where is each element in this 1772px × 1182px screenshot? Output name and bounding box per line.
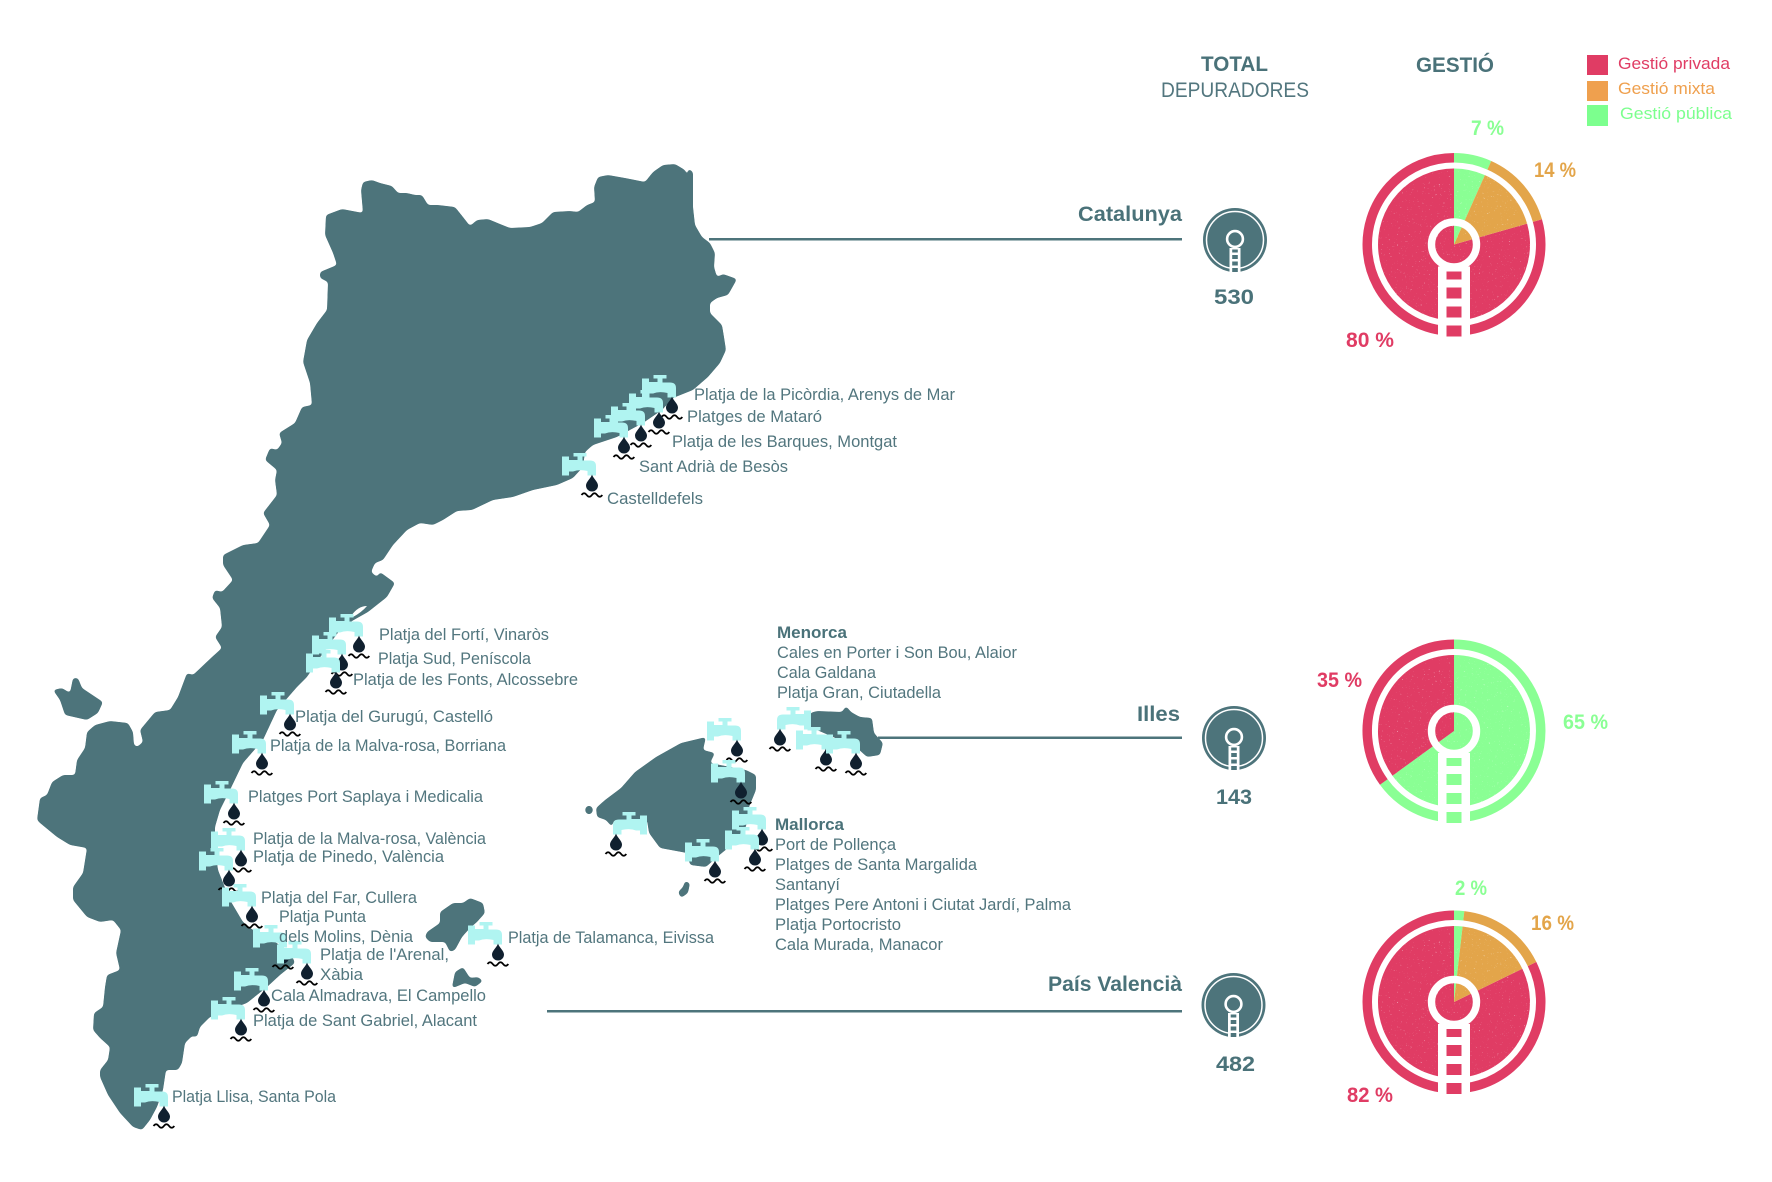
beach labels: País Valencià: Platja del Gurugú, Castelló (295, 707, 493, 726)
beach labels: País Valencià: Platja de Pinedo, València (253, 847, 445, 866)
map: Eivissa (425, 898, 485, 952)
beach list: Mallorca: Platges Pere Antoni i Ciutat Jardí, Palma (775, 895, 1072, 914)
beach labels: País Valencià: Platja Llisa, Santa Pola (172, 1087, 336, 1106)
beach labels: País Valencià: Platges Port Saplaya i Medicalia (248, 787, 484, 806)
beach list: Menorca: Cales en Porter i Son Bou, Alaior (777, 643, 1017, 662)
beach list: Mallorca: Platges de Santa Margalida (775, 855, 978, 874)
pie chart: Catalunya (1367, 158, 1541, 338)
number: Illes total: 143 (1216, 786, 1252, 809)
beach labels: País Valencià: Platja del Far, Cullera (261, 888, 418, 907)
beach list: Mallorca: Port de Pollença (775, 835, 897, 854)
beach labels: País Valencià: Platja de les Fonts, Alcossebre (353, 670, 578, 689)
beach labels: País Valencià (172, 625, 578, 1106)
beach list: Menorca (777, 623, 1017, 702)
beach labels: País Valencià: Cala Almadrava, El Campello (271, 986, 486, 1005)
beach labels: Catalunya: Castelldefels (607, 489, 703, 508)
beach labels: Catalunya: Sant Adrià de Besòs (639, 457, 788, 476)
beach labels: País Valencià: Xàbia (320, 965, 364, 984)
number: Catalunya total: 530 (1214, 286, 1254, 309)
percentage: Catalunya mixta: 14 % (1534, 159, 1576, 182)
beach list: Menorca: Cala Galdana (777, 663, 877, 682)
percentage: Illes pública: 65 % (1563, 711, 1608, 734)
icon: País Valencià total (1202, 973, 1266, 1038)
beach list: Mallorca: Platja Portocristo (775, 915, 901, 934)
beach labels: Catalunya: Platges de Mataró (687, 407, 822, 426)
map: Cabrera (678, 881, 690, 898)
legend: Gestió privada (1618, 54, 1731, 73)
pie chart: País Valencià (1367, 915, 1541, 1096)
pie chart: Illes (1367, 644, 1541, 825)
beach list: Menorca: Platja Gran, Ciutadella (777, 683, 942, 702)
beach labels: País Valencià: Platja Sud, Peníscola (378, 649, 532, 668)
icon: Illes total (1202, 706, 1266, 771)
beach labels: País Valencià: Platja de la Malva-rosa, València (253, 829, 487, 848)
column heading: total depuradores: TOTAL (1201, 53, 1268, 76)
connector line: Illes (878, 736, 1182, 739)
beach labels: Catalunya: Platja de les Barques, Montgat (672, 432, 897, 451)
map: Mallorca (596, 737, 756, 867)
map: Menorca (810, 706, 883, 757)
map: Dragonera (585, 806, 593, 814)
beach labels: País Valencià: dels Molins, Dènia (279, 927, 414, 946)
beach labels: Catalunya: Platja de la Picòrdia, Arenys de Mar (694, 385, 955, 404)
percentage: País Valencià pública: 2 % (1455, 877, 1487, 900)
beach list: Mallorca: Santanyí (775, 875, 840, 894)
number: País Valencià total: 482 (1216, 1053, 1255, 1076)
map: Catalunya and País Valencià (37, 164, 737, 1130)
legend (1587, 54, 1733, 126)
Alfacs bay notch (351, 606, 367, 617)
beach labels: País Valencià: Platja de la Malva-rosa, Borriana (270, 736, 507, 755)
legend: Gestió mixta (1618, 79, 1716, 98)
beach labels: País Valencià: Platja del Fortí, Vinaròs (379, 625, 549, 644)
percentage: País Valencià privada: 82 % (1347, 1084, 1393, 1107)
beach labels: País Valencià: Platja Punta (279, 907, 367, 926)
connector line: Catalunya (709, 238, 1182, 240)
percentage: Illes privada: 35 % (1317, 669, 1362, 692)
map: Ademús enclave (53, 678, 103, 720)
region heading: Catalunya: Catalunya (1078, 203, 1182, 226)
map: Formentera (452, 967, 483, 988)
beach labels: País Valencià: Platja de l'Arenal, (320, 945, 449, 964)
column heading: total depuradores: DEPURADORES (1161, 79, 1309, 102)
water discharge icons: mainland (134, 375, 682, 1128)
beach list: Mallorca (775, 815, 1072, 954)
legend: Gestió pública (1620, 104, 1733, 123)
percentage: Catalunya pública: 7 % (1471, 117, 1504, 140)
beach list: Mallorca: Cala Murada, Manacor (775, 935, 943, 954)
map of Catalunya, País Valencià and Balears (37, 164, 883, 1130)
beach label: Eivissa: Platja de Talamanca, Eivissa (508, 928, 715, 947)
percentage: Catalunya privada: 80 % (1346, 329, 1394, 352)
region heading: Illes: Illes (1137, 703, 1180, 726)
column heading: gestió: GESTIÓ (1416, 53, 1494, 77)
beach labels: Catalunya (607, 385, 955, 508)
column heading: total depuradores (1161, 53, 1309, 102)
region heading: País Valencià: País Valencià (1048, 973, 1182, 996)
beach list: Mallorca: Mallorca (775, 815, 845, 834)
beach labels: País Valencià: Platja de Sant Gabriel, Alacant (253, 1011, 477, 1030)
beach list: Menorca: Menorca (777, 623, 848, 642)
percentage: País Valencià mixta: 16 % (1531, 912, 1574, 935)
connector line: País Valencià (547, 1010, 1182, 1012)
icon: Catalunya total (1203, 208, 1267, 273)
water discharge icons: Balears (468, 707, 866, 966)
